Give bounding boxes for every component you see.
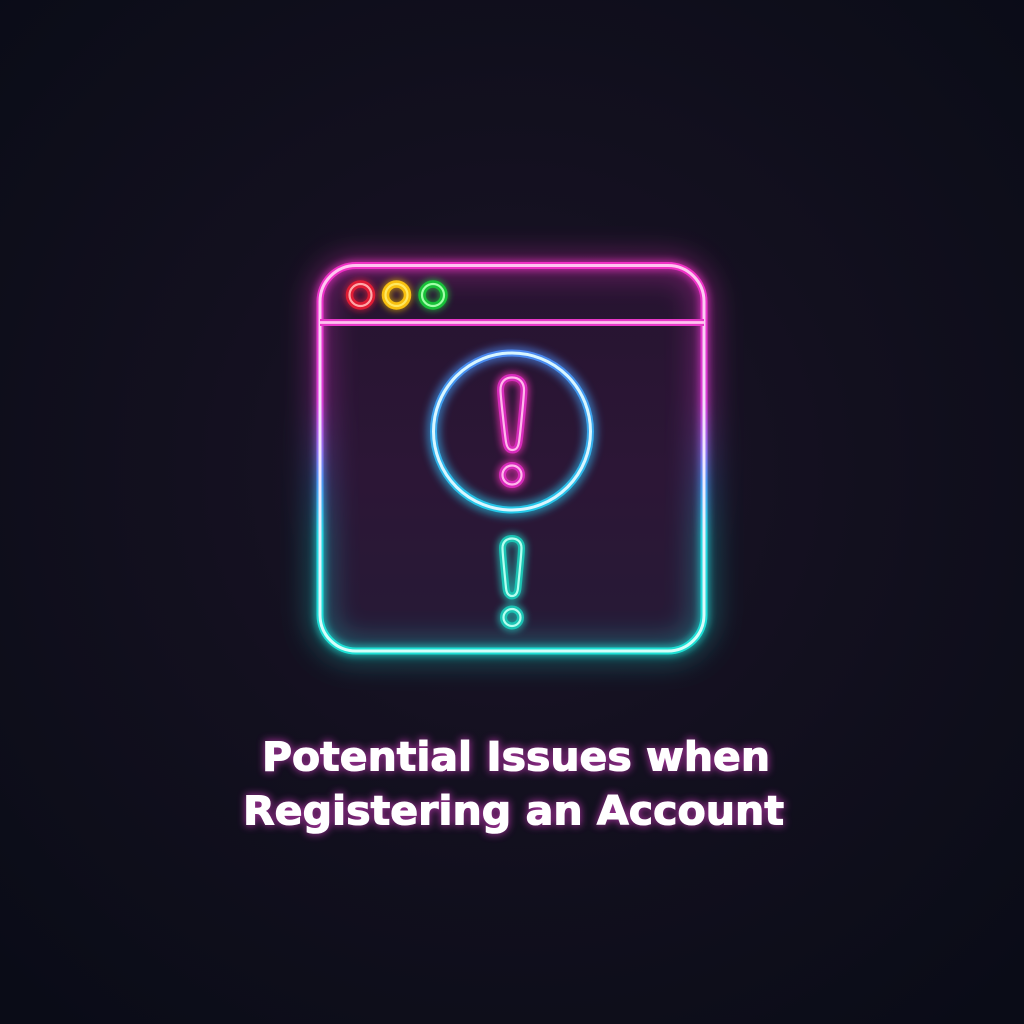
green window dot xyxy=(422,284,444,306)
window frame xyxy=(320,266,704,651)
title line 2: Registering an Account xyxy=(243,788,784,834)
warning circle xyxy=(434,353,590,510)
window frame outer glow xyxy=(320,266,704,651)
window interior fill xyxy=(320,266,704,651)
title glow: Registering an Account xyxy=(243,788,784,834)
title glow: Potential Issues when xyxy=(262,734,770,780)
title glow xyxy=(243,734,784,834)
title bar divider xyxy=(320,318,704,328)
yellow window dot xyxy=(386,284,408,306)
cyan exclamation mark xyxy=(502,538,522,626)
browser window icon xyxy=(320,266,704,651)
red window dot xyxy=(350,284,372,306)
pink exclamation mark xyxy=(500,378,524,484)
title xyxy=(243,734,784,834)
title line 1: Potential Issues when xyxy=(262,734,770,780)
